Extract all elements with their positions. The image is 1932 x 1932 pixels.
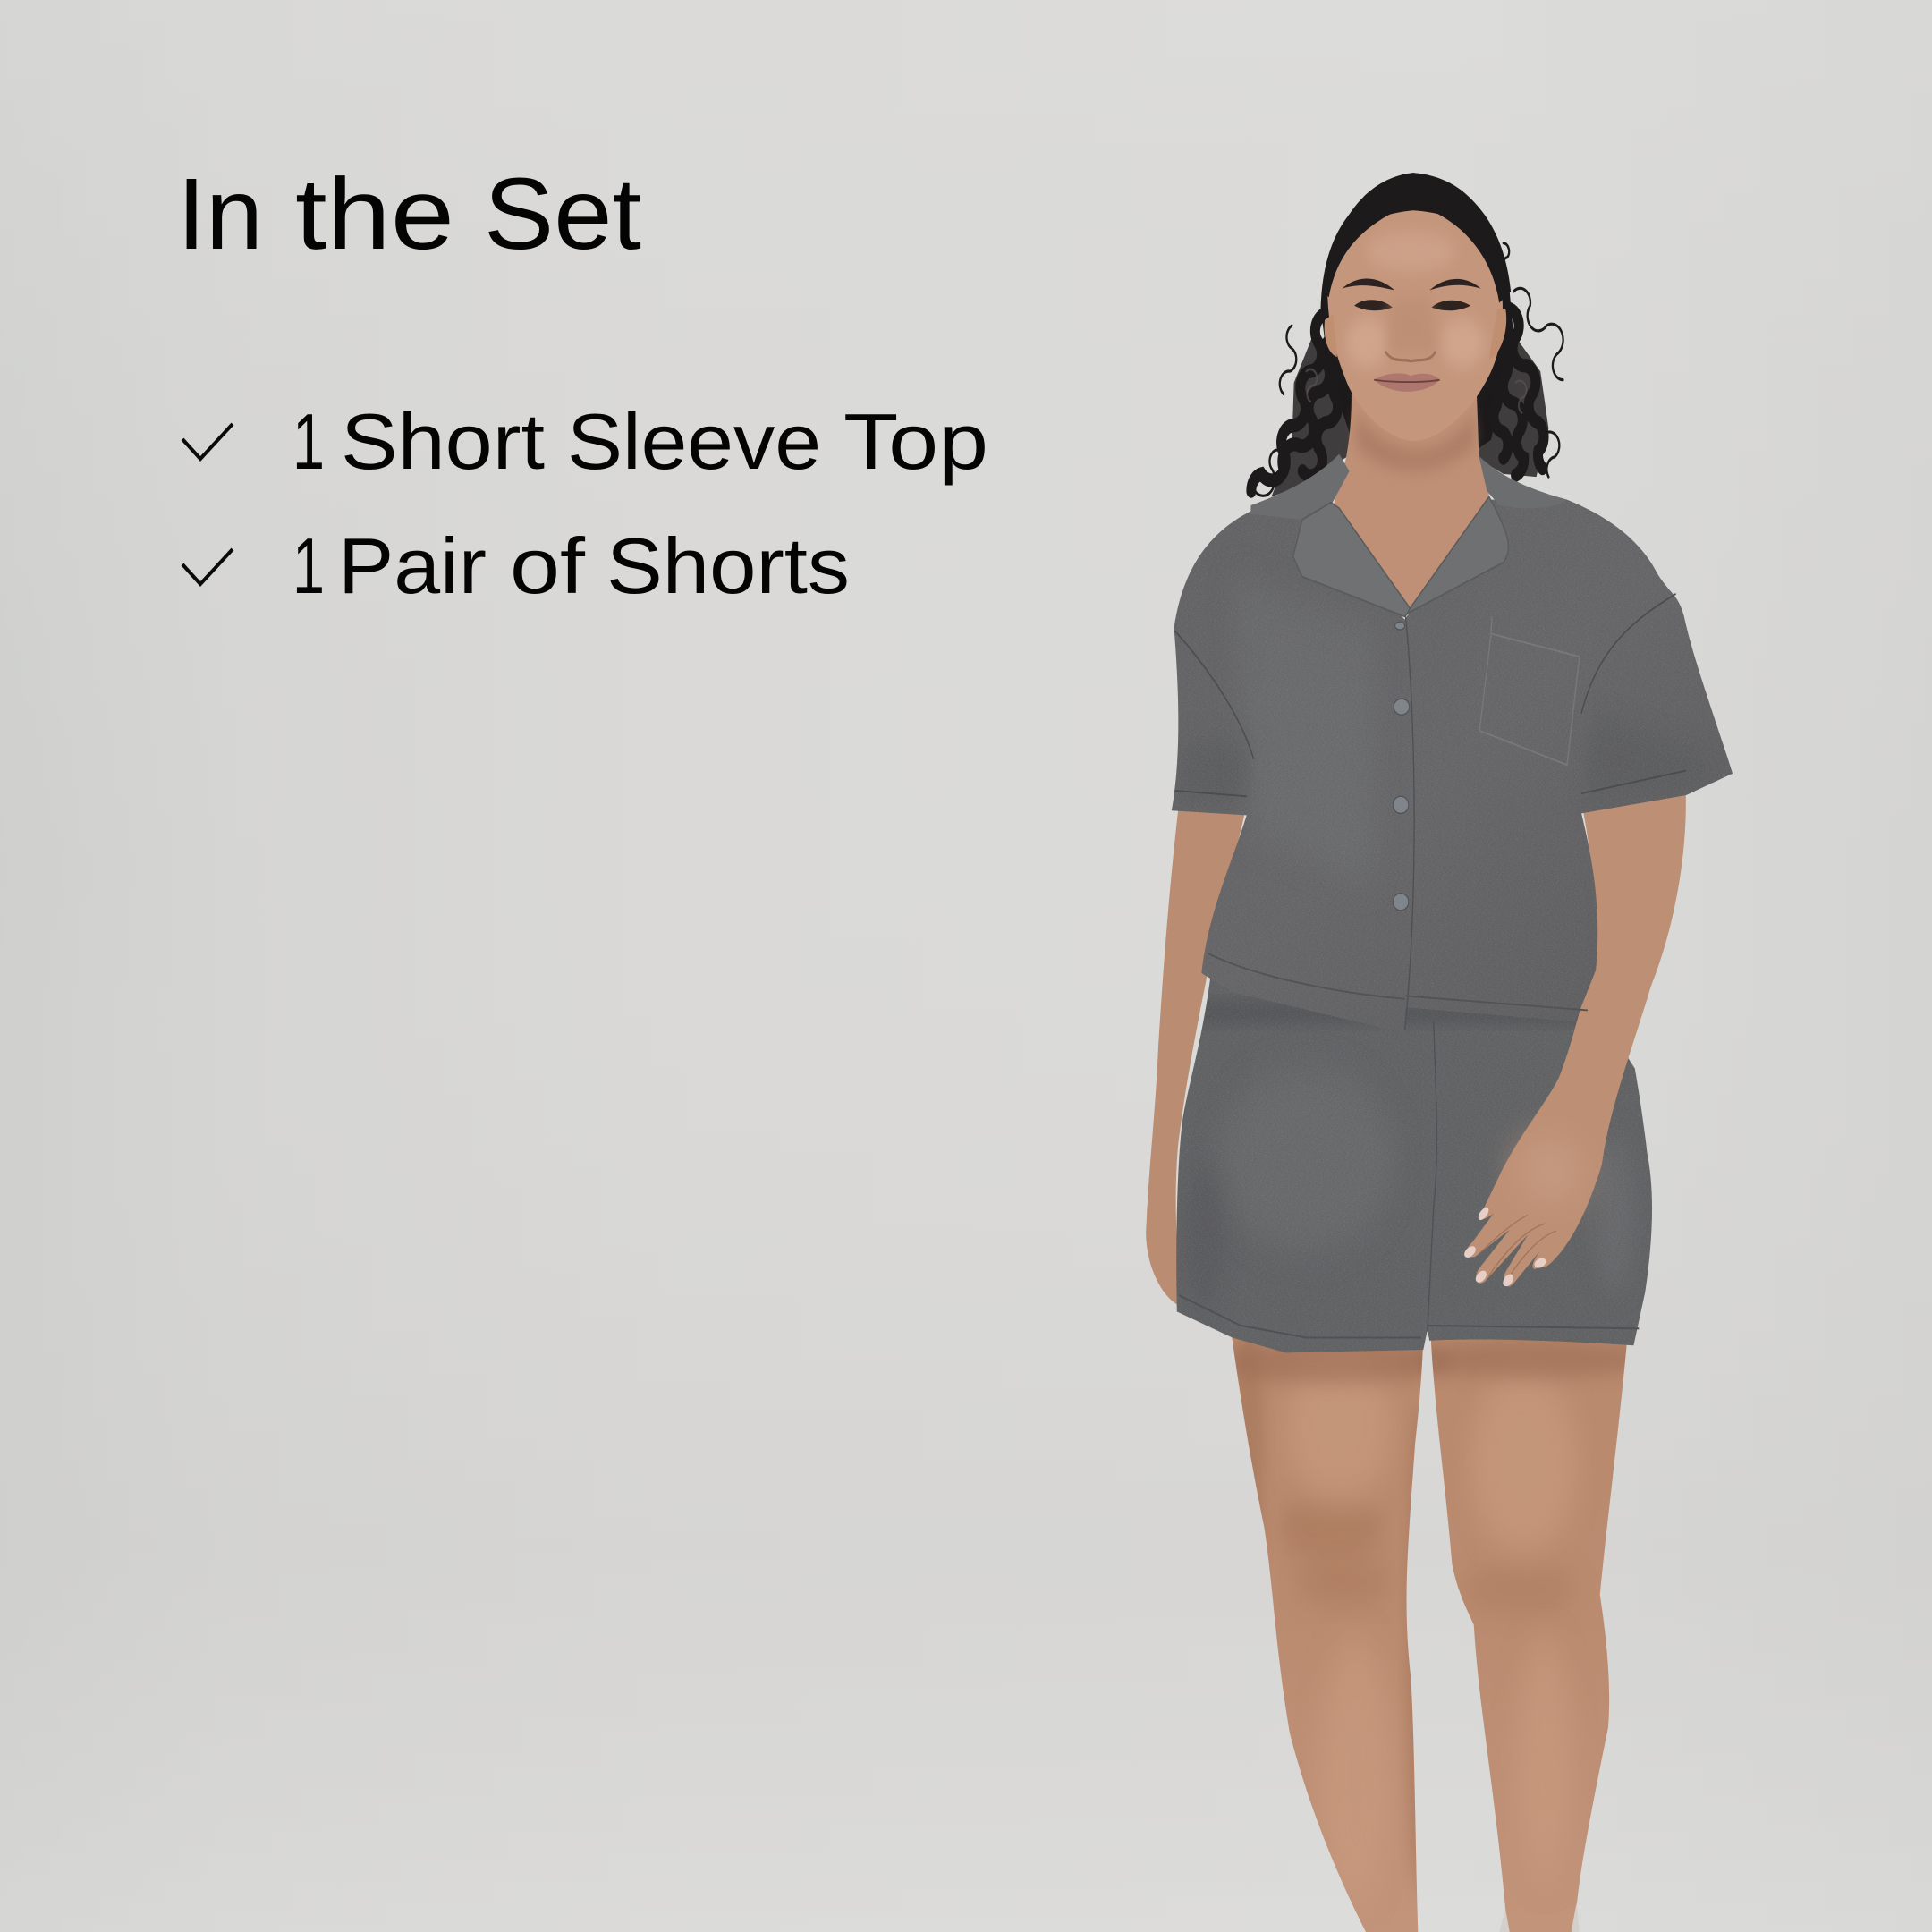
nose [1385, 352, 1436, 361]
label: 1 [292, 397, 325, 486]
eyes [1354, 300, 1470, 310]
label: of [510, 521, 586, 610]
collar right [1479, 456, 1567, 508]
hem [1208, 953, 1588, 1010]
label: 1 [292, 521, 325, 610]
fingernails [1462, 1206, 1547, 1288]
label: Pair [338, 521, 487, 610]
item: short sleeve top [182, 397, 988, 486]
icon: check [182, 549, 233, 584]
shoes [1499, 1903, 1580, 1932]
item: pair of shorts [182, 521, 850, 610]
ears [1325, 309, 1506, 359]
shorts [1176, 979, 1652, 1352]
model photo: woman in grey pyjama set [1146, 173, 1746, 1932]
shirt [1150, 454, 1746, 1045]
hair parting [1322, 173, 1511, 303]
label: Short [341, 397, 545, 486]
buttons [1393, 622, 1410, 911]
placket [1405, 616, 1414, 1030]
heading: Set [484, 157, 641, 270]
left arm and hand [1146, 801, 1247, 1306]
face [1322, 173, 1511, 441]
checklist [182, 397, 988, 610]
label: Shorts [606, 521, 850, 610]
heading: the [295, 157, 454, 270]
lapel right [1407, 496, 1508, 614]
legs [1232, 1337, 1627, 1932]
lips [1374, 373, 1440, 392]
icon: check [182, 424, 233, 459]
upper body [1150, 173, 1746, 1045]
collar left [1250, 454, 1350, 520]
sleeve seams [1174, 594, 1686, 796]
lapel left [1293, 503, 1411, 616]
shorts seams and hem [1179, 1021, 1639, 1337]
heading [177, 157, 641, 270]
legs and shorts [1176, 979, 1652, 1932]
label: Sleeve [567, 397, 821, 486]
heading: In [177, 157, 263, 270]
hair with ringlets [1251, 173, 1563, 496]
curl highlights [1306, 176, 1527, 413]
eyebrows [1342, 279, 1481, 291]
right arm and hand [1462, 789, 1686, 1288]
pocket [1479, 616, 1580, 765]
neck and chest [1333, 394, 1489, 616]
label: Top [843, 397, 988, 486]
